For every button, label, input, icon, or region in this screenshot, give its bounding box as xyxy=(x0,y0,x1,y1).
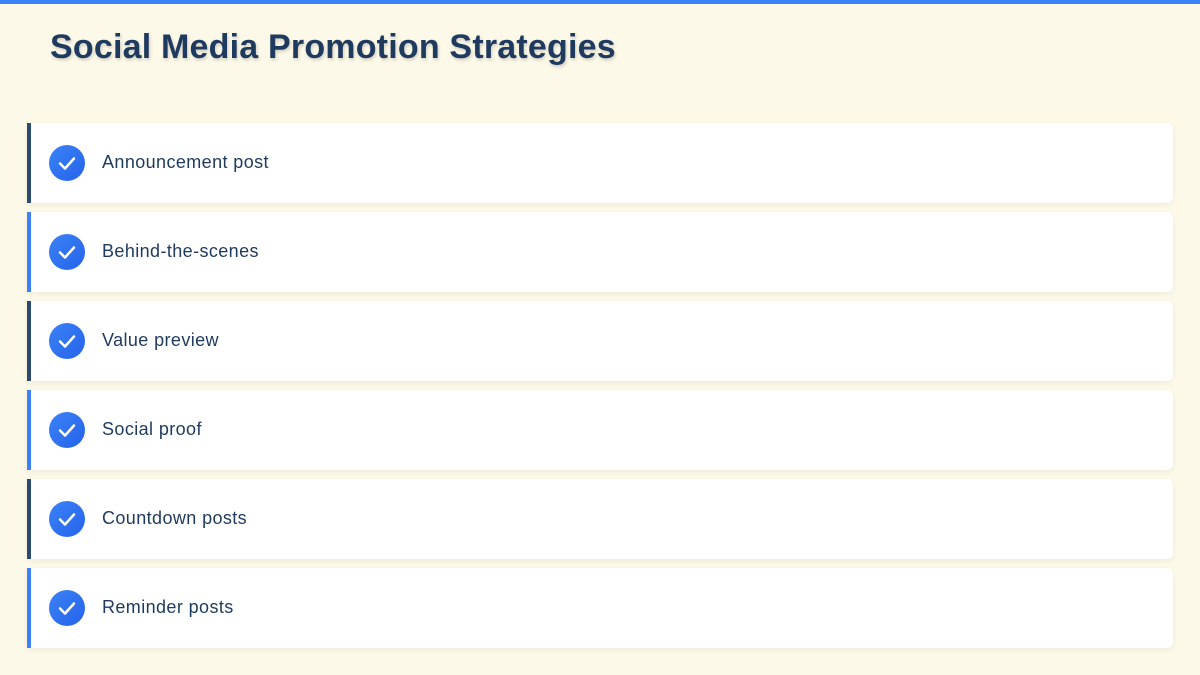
card: announcement post: Announcement post xyxy=(102,152,269,172)
card: behind-the-scenes xyxy=(27,212,1173,292)
card: announcement post xyxy=(27,123,1173,203)
card: value preview xyxy=(27,301,1173,381)
card: social proof: Social proof xyxy=(102,419,202,439)
card: value preview: Value preview xyxy=(102,330,219,350)
list of strategies xyxy=(27,123,1173,650)
card: countdown posts xyxy=(27,479,1173,559)
card: behind-the-scenes: Behind-the-scenes xyxy=(102,241,259,261)
card: reminder posts: Reminder posts xyxy=(102,597,234,617)
card: countdown posts: Countdown posts xyxy=(102,508,247,528)
card: social proof xyxy=(27,390,1173,470)
card: reminder posts xyxy=(27,568,1173,648)
title: Social Media Promotion Strategies xyxy=(50,28,616,66)
